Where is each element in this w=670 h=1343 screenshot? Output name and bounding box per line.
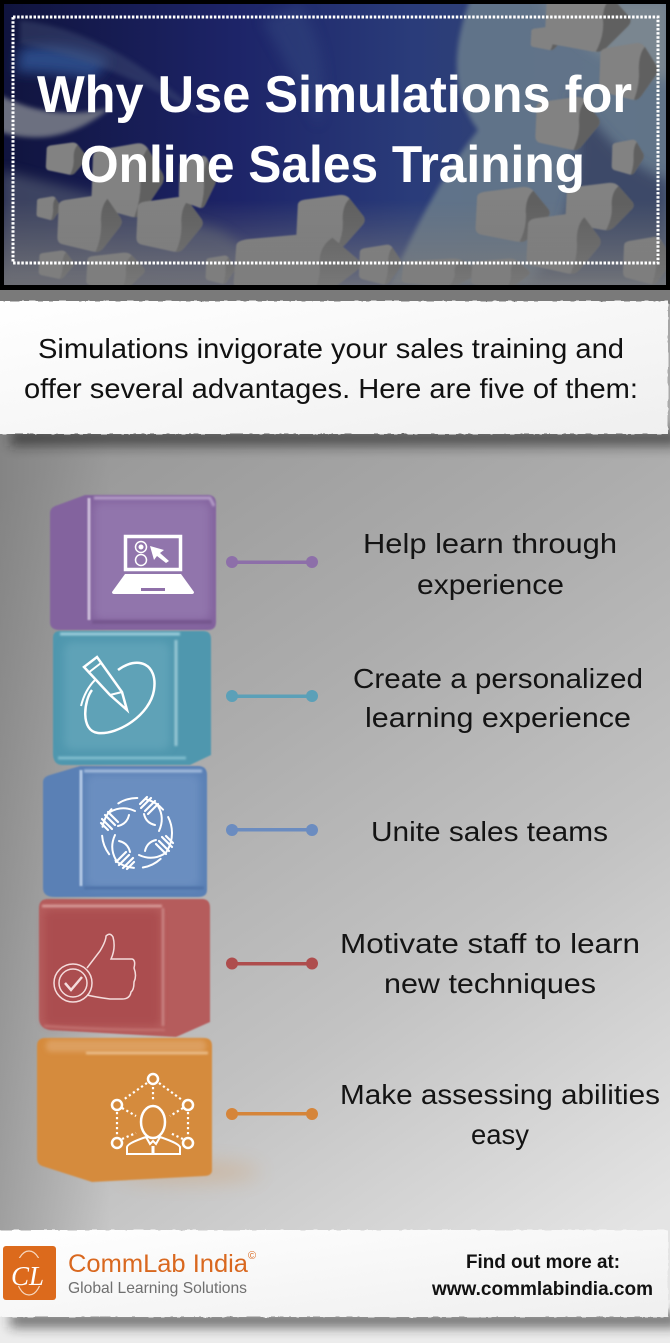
label: unite: Unite sales teams xyxy=(371,816,608,847)
label: motivate: Motivate staff to learn xyxy=(340,928,640,959)
label: personalized xyxy=(353,663,643,733)
connector: purple xyxy=(226,556,318,568)
label: assessing xyxy=(340,1079,660,1150)
cube 1: purple xyxy=(50,495,216,630)
cube 3: blue xyxy=(43,766,207,897)
label: personalized: Create a personalized xyxy=(353,663,643,694)
find out more: www.commlabindia.com xyxy=(431,1279,653,1300)
title xyxy=(37,66,632,194)
cube 5: orange xyxy=(37,1038,212,1182)
label: help learn: experience xyxy=(417,569,564,600)
label: assessing: easy xyxy=(471,1119,529,1150)
label: personalized: learning experience xyxy=(365,702,631,733)
cube 4: red xyxy=(39,899,210,1037)
label: motivate xyxy=(340,928,640,999)
connector: red xyxy=(226,958,318,970)
hand 3 xyxy=(139,836,173,858)
logo mark xyxy=(3,1246,56,1300)
logo text: CommLab India xyxy=(68,1250,248,1278)
intro text: offer several advantages. Here are five of them: xyxy=(24,373,638,404)
hand 2 xyxy=(140,797,162,831)
connector: blue xyxy=(226,824,318,836)
logo text: © xyxy=(248,1250,256,1262)
dotted title frame xyxy=(13,17,658,263)
background cubes xyxy=(36,0,670,299)
label: help learn xyxy=(363,528,617,600)
logo mark: CL xyxy=(11,1261,44,1291)
title: Online Sales Training xyxy=(80,136,585,194)
hand 4 xyxy=(112,835,134,869)
cube stack xyxy=(37,495,260,1182)
connector: teal xyxy=(226,690,318,702)
find out more: Find out more at: xyxy=(466,1252,620,1273)
icon: person network xyxy=(112,1074,193,1154)
logo text: Global Learning Solutions xyxy=(68,1280,247,1297)
connector: orange xyxy=(226,1108,318,1120)
icon: thumbs up with check badge xyxy=(54,934,136,1002)
icon: pencil and ellipse xyxy=(81,657,155,733)
label: help learn: Help learn through xyxy=(363,528,617,559)
hand 1 xyxy=(101,808,135,830)
label: assessing: Make assessing abilities xyxy=(340,1079,660,1110)
cube 2: teal xyxy=(53,631,211,765)
footer panel xyxy=(0,1230,670,1327)
icon: joined hands xyxy=(101,797,173,869)
label: motivate: new techniques xyxy=(384,968,596,999)
page background xyxy=(0,290,670,1343)
intro text: Simulations invigorate your sales training and xyxy=(38,333,624,364)
header banner xyxy=(0,0,670,299)
find out more xyxy=(431,1252,653,1300)
intro text xyxy=(24,333,638,404)
intro panel xyxy=(0,290,670,446)
title: Why Use Simulations for xyxy=(37,66,632,124)
icon: laptop with cursor xyxy=(112,536,194,594)
logo text xyxy=(68,1250,256,1297)
